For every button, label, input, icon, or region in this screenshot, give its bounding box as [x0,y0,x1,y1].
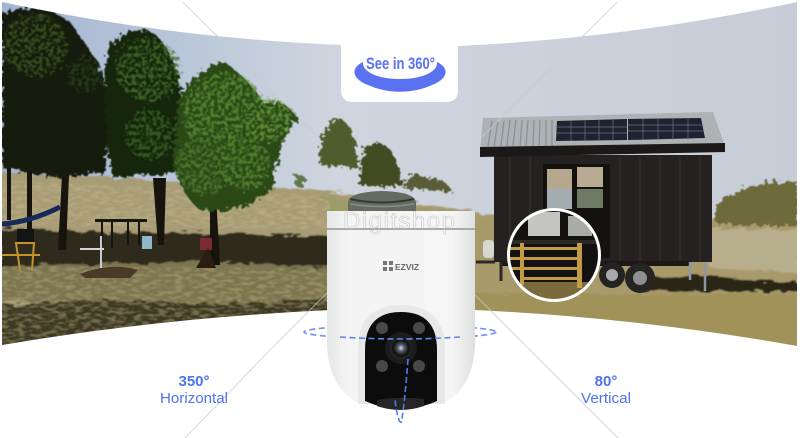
label: vertical: Vertical [581,390,631,407]
window [543,164,610,258]
field left [0,172,480,350]
field right [470,215,800,350]
trunks [7,165,220,265]
label: horizontal [160,373,228,407]
solar panels [556,118,705,141]
grass tufts left [0,180,340,345]
icon: blue ring crescent [354,62,446,92]
badge text: See in 360° [366,54,435,73]
camera [327,191,475,410]
label: horizontal: 350° [178,373,210,390]
magnified detail circle [507,208,601,302]
label: horizontal: Horizontal [160,390,228,407]
camera top cap [348,191,416,211]
sky [0,0,800,240]
panoramic photo [0,0,800,350]
icon: vertical rotation ring [395,359,408,422]
watermark text: Digitshop [343,208,455,235]
tree foliage [2,6,298,211]
house wall [494,155,712,262]
LED lights [376,322,425,372]
tiny house [476,112,725,293]
leaf highlights [3,13,292,195]
icon: horizontal rotation ring back [304,326,496,338]
gas bottle [483,240,494,258]
callout: see in 360 badge [341,40,458,102]
lower speaker [377,398,424,410]
label: vertical: 80° [595,373,617,390]
distant bush trees [294,118,798,226]
logo: EZVIZ [383,261,419,272]
trailer wheels and legs [500,261,690,266]
icon: horizontal rotation ring front [340,337,460,339]
watermark lines [183,2,618,438]
lens [385,332,417,364]
camera face arch [358,305,445,404]
camp furniture [2,207,216,278]
roof [480,112,724,147]
label: vertical [581,373,631,407]
wooden fence [510,243,582,288]
logo: EZVIZ: EZVIZ [395,262,419,272]
camera body [327,211,475,403]
